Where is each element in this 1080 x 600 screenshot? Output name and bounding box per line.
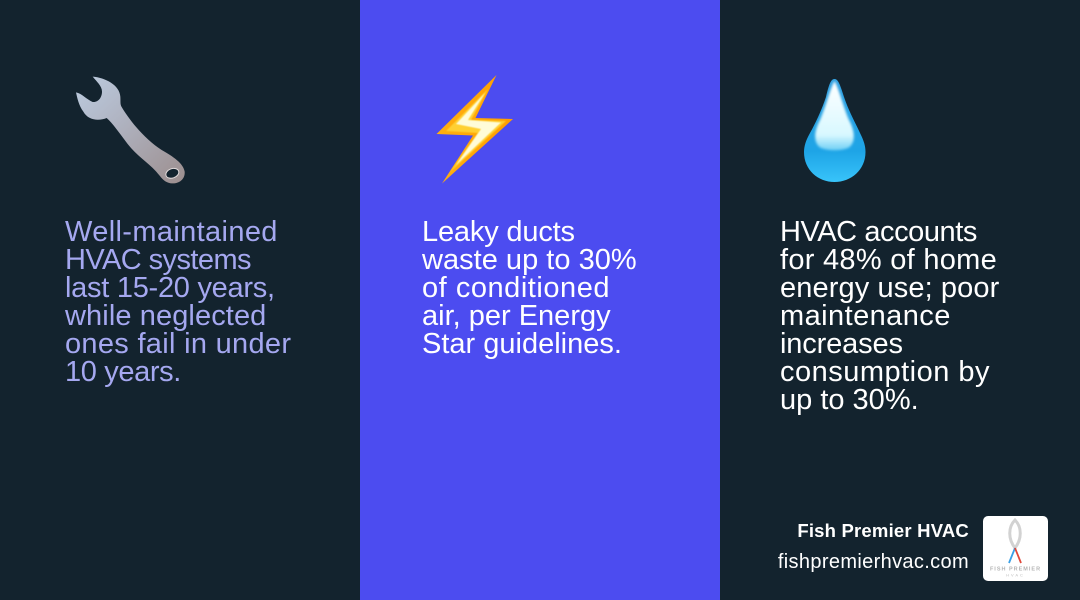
text: energy fact: consumption by <box>780 356 990 388</box>
text: lifespan fact <box>65 216 291 388</box>
icon: lightning bolt <box>436 75 513 184</box>
text: duct fact: Leaky ducts <box>422 216 575 248</box>
text: website: fishpremierhvac.com <box>778 551 969 573</box>
text: lifespan fact: 10 years. <box>65 356 181 388</box>
logo card: FISH PREMIER <box>990 566 1041 572</box>
text: duct fact: Star guidelines. <box>422 328 622 360</box>
icon: wrench <box>76 76 185 184</box>
text: lifespan fact: last 15-20 years, <box>65 272 275 304</box>
text: energy fact: up to 30%. <box>780 384 919 416</box>
panel: maintenance lifespan <box>0 0 360 600</box>
logo card: HVAC <box>1006 572 1025 578</box>
footer: brand block <box>778 516 1048 581</box>
text: lifespan fact: while neglected <box>65 300 266 332</box>
text: energy fact <box>780 216 999 416</box>
text: lifespan fact: ones fail in under <box>65 328 291 360</box>
text: duct fact: of conditioned <box>422 272 610 304</box>
text: lifespan fact: HVAC systems <box>65 244 251 276</box>
logo card <box>983 516 1048 581</box>
panel: leaky ducts <box>360 0 720 600</box>
text: energy fact: for 48% of home <box>780 244 997 276</box>
text: duct fact <box>422 216 637 360</box>
text: duct fact: waste up to 30% <box>422 244 637 276</box>
icon: water drop <box>804 79 866 182</box>
text: energy fact: energy use; poor <box>780 272 999 304</box>
text: lifespan fact: Well-maintained <box>65 216 278 248</box>
text: brand name: Fish Premier HVAC <box>797 520 969 541</box>
text: energy fact: maintenance <box>780 300 951 332</box>
panel: home energy use <box>720 0 1080 600</box>
text: energy fact: HVAC accounts <box>780 216 977 248</box>
text: energy fact: increases <box>780 328 903 360</box>
text: duct fact: air, per Energy <box>422 300 611 332</box>
